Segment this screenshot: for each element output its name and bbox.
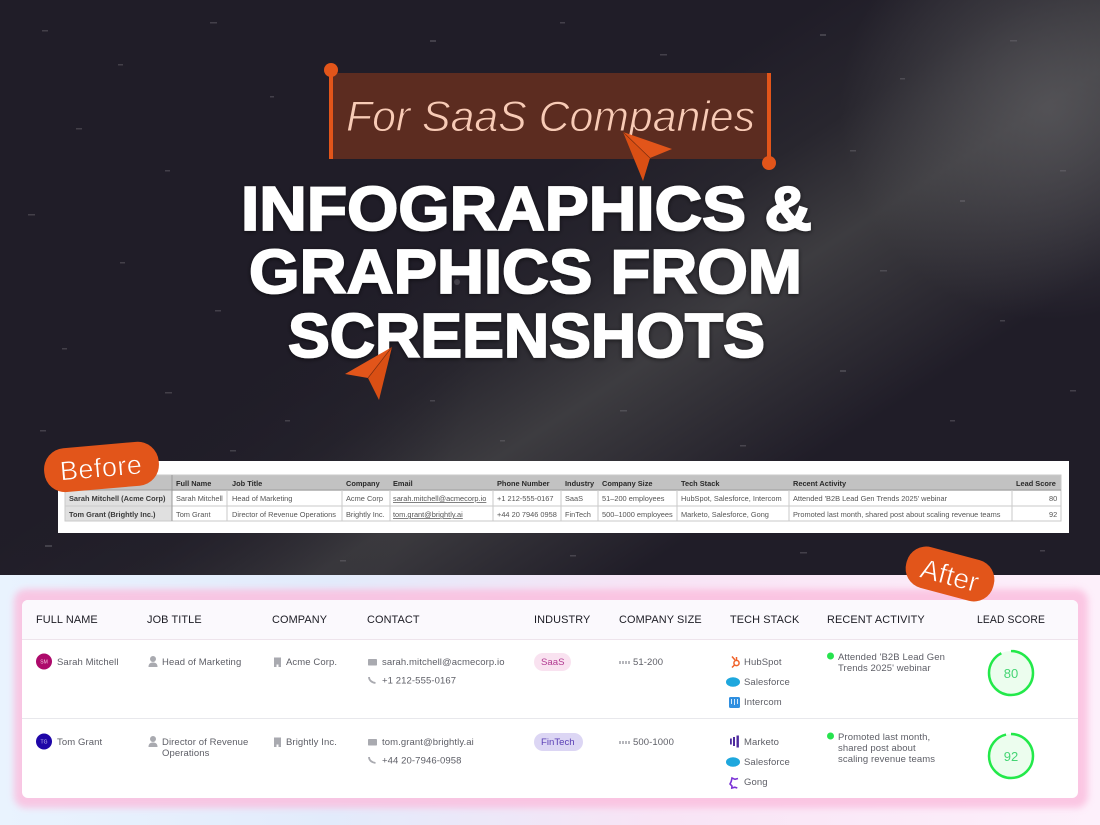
before table row: Tom Grant: FinTech	[565, 510, 591, 519]
after table row: Sarah Mitchell: Head of Marketing	[162, 657, 241, 668]
after table row: Tom Grant: Promoted last month,	[838, 732, 930, 743]
after table row: Sarah Mitchell	[36, 651, 1033, 708]
before table row: Sarah Mitchell: 51–200 employees	[602, 494, 665, 503]
lead score ring: 92	[989, 734, 1033, 778]
after table header: CONTACT	[367, 614, 420, 626]
after table row: Sarah Mitchell: Attended 'B2B Lead Gen	[838, 652, 945, 663]
subtitle label: For SaaS Companies	[324, 63, 776, 170]
after table header: FULL NAME	[36, 614, 98, 626]
after table row: Tom Grant: tom.grant@brightly.ai	[382, 737, 474, 748]
icon: person	[148, 656, 158, 667]
before table header	[176, 479, 1056, 488]
after table header: INDUSTRY	[534, 614, 591, 626]
after badge	[901, 542, 999, 606]
after table row: Tom Grant	[36, 732, 1033, 788]
before table header: Company Size	[602, 479, 653, 488]
avatar: SM: SM	[40, 660, 48, 666]
before table row: Sarah Mitchell: Sarah Mitchell (Acme Corp)	[69, 494, 166, 503]
before badge: Before	[59, 449, 144, 487]
after table row: Sarah Mitchell: Intercom	[744, 697, 782, 708]
before table row: Tom Grant: 500–1000 employees	[602, 510, 673, 519]
before table row: Sarah Mitchell: Head of Marketing	[232, 494, 292, 503]
after table row: Tom Grant: Brightly Inc.	[286, 737, 337, 748]
avatar: TG	[36, 734, 52, 750]
tag: SaaS	[534, 653, 571, 671]
after badge: After	[917, 553, 982, 598]
before panel: spreadsheet screenshot	[58, 461, 1069, 533]
icon: Gong	[730, 778, 738, 788]
before table header: Industry	[565, 479, 595, 488]
after table row: Tom Grant: +44 20-7946-0958	[382, 756, 462, 766]
before table header: Phone Number	[497, 479, 550, 488]
after table row: Sarah Mitchell: Sarah Mitchell	[57, 657, 119, 668]
before table row: Tom Grant: Brightly Inc.	[346, 510, 385, 519]
after table row: Tom Grant: Tom Grant	[57, 737, 103, 748]
avatar: SM	[36, 654, 52, 670]
after table row: Tom Grant: Marketo	[744, 737, 779, 748]
before table row: Sarah Mitchell	[69, 494, 1057, 503]
after table header: COMPANY	[272, 614, 328, 626]
after table row: Tom Grant: Gong	[744, 777, 768, 788]
icon: mail	[368, 739, 377, 746]
tag: FinTech	[534, 733, 583, 751]
icon: Salesforce	[726, 757, 740, 767]
before table header: Full Name	[176, 479, 211, 488]
icon: building	[274, 738, 281, 747]
icon: phone	[369, 757, 376, 763]
after table row: Tom Grant: 500-1000	[633, 737, 674, 748]
after table header	[36, 614, 1045, 626]
icon: team	[619, 741, 630, 744]
icon: person	[148, 736, 158, 747]
main title: INFOGRAPHICS &	[241, 175, 812, 244]
before table row: Sarah Mitchell: HubSpot, Salesforce, Intercom	[681, 494, 782, 503]
main title	[241, 175, 812, 371]
lead score ring: 92: 92	[1004, 749, 1018, 764]
before table row: Sarah Mitchell: Acme Corp	[346, 494, 383, 503]
tag: SaaS: SaaS	[541, 657, 564, 668]
icon: phone	[369, 677, 376, 683]
before table row: Tom Grant: tom.grant@brightly.ai	[393, 510, 463, 519]
before table row: Tom Grant: Tom Grant (Brightly Inc.)	[69, 510, 156, 519]
before table header: Job Title	[232, 479, 262, 488]
before table row: Tom Grant: Tom Grant	[176, 510, 210, 519]
arrow: paper plane bottom	[345, 347, 392, 400]
before table row: Sarah Mitchell: SaaS	[565, 494, 583, 503]
after table row: Tom Grant: Operations	[162, 748, 210, 759]
after table header: JOB TITLE	[147, 614, 202, 626]
before table row: Tom Grant: +44 20 7946 0958	[497, 510, 557, 519]
avatar: TG: TG	[41, 740, 48, 746]
after table row: Sarah Mitchell: 51-200	[633, 657, 663, 668]
icon: building	[274, 658, 281, 667]
after table row: Sarah Mitchell: HubSpot	[744, 657, 782, 668]
before table header: Recent Activity	[793, 479, 847, 488]
arrow: paper plane top	[623, 132, 672, 181]
before table header: Email	[393, 479, 413, 488]
after table header: TECH STACK	[730, 614, 800, 626]
after table row: Sarah Mitchell: Acme Corp.	[286, 657, 337, 668]
subtitle label: For SaaS Companies: For SaaS Companies	[346, 93, 755, 141]
before table row: Tom Grant	[69, 510, 1057, 519]
icon: Marketo	[730, 736, 739, 748]
before table row: Sarah Mitchell: 80	[1049, 494, 1057, 503]
lead score ring: 80	[989, 651, 1033, 695]
after table row: Tom Grant: Director of Revenue	[162, 737, 248, 748]
after table row: Tom Grant: shared post about	[838, 743, 916, 754]
icon: team	[619, 661, 630, 664]
after table row: Tom Grant: scaling revenue teams	[838, 754, 935, 765]
before table row: Sarah Mitchell: Attended 'B2B Lead Gen Trends 2025' webinar	[793, 494, 948, 503]
before table row: Sarah Mitchell: Sarah Mitchell	[176, 494, 223, 503]
after table header: COMPANY SIZE	[619, 614, 702, 626]
lead score ring: 80: 80	[1004, 666, 1018, 681]
before table row: Tom Grant: 92	[1049, 510, 1057, 519]
main title: SCREENSHOTS	[288, 302, 765, 371]
dark space background	[0, 0, 1100, 575]
before table row: Sarah Mitchell: sarah.mitchell@acmecorp.io	[393, 494, 486, 503]
before table row: Sarah Mitchell: +1 212-555-0167	[497, 494, 554, 503]
icon: HubSpot	[732, 656, 739, 668]
icon: mail	[368, 659, 377, 666]
before table row: Tom Grant: Marketo, Salesforce, Gong	[681, 510, 769, 519]
before badge	[42, 440, 161, 494]
before table header: Company	[346, 479, 381, 488]
after table row: Sarah Mitchell: sarah.mitchell@acmecorp.io	[382, 657, 505, 668]
after table row: Sarah Mitchell: Trends 2025' webinar	[838, 663, 931, 674]
before table row: Tom Grant: Director of Revenue Operations	[232, 510, 336, 519]
icon: Intercom	[729, 697, 740, 708]
activity dot	[827, 652, 834, 660]
after table row: Sarah Mitchell: +1 212-555-0167	[382, 676, 456, 686]
before table header: Tech Stack	[681, 479, 720, 488]
before table header: Lead Score	[1016, 479, 1056, 488]
after table row: Sarah Mitchell: Salesforce	[744, 677, 790, 688]
icon: Salesforce	[726, 677, 740, 687]
after panel: modern table card	[14, 589, 1088, 808]
main title: GRAPHICS FROM	[249, 238, 802, 307]
after section background	[0, 575, 1100, 825]
activity dot	[827, 732, 834, 740]
tag: FinTech: FinTech	[541, 737, 575, 748]
after table row: Tom Grant: Salesforce	[744, 757, 790, 768]
after table header: RECENT ACTIVITY	[827, 614, 925, 626]
after table header: LEAD SCORE	[977, 614, 1045, 626]
before table row: Tom Grant: Promoted last month, shared post about scaling revenue teams	[793, 510, 1001, 519]
